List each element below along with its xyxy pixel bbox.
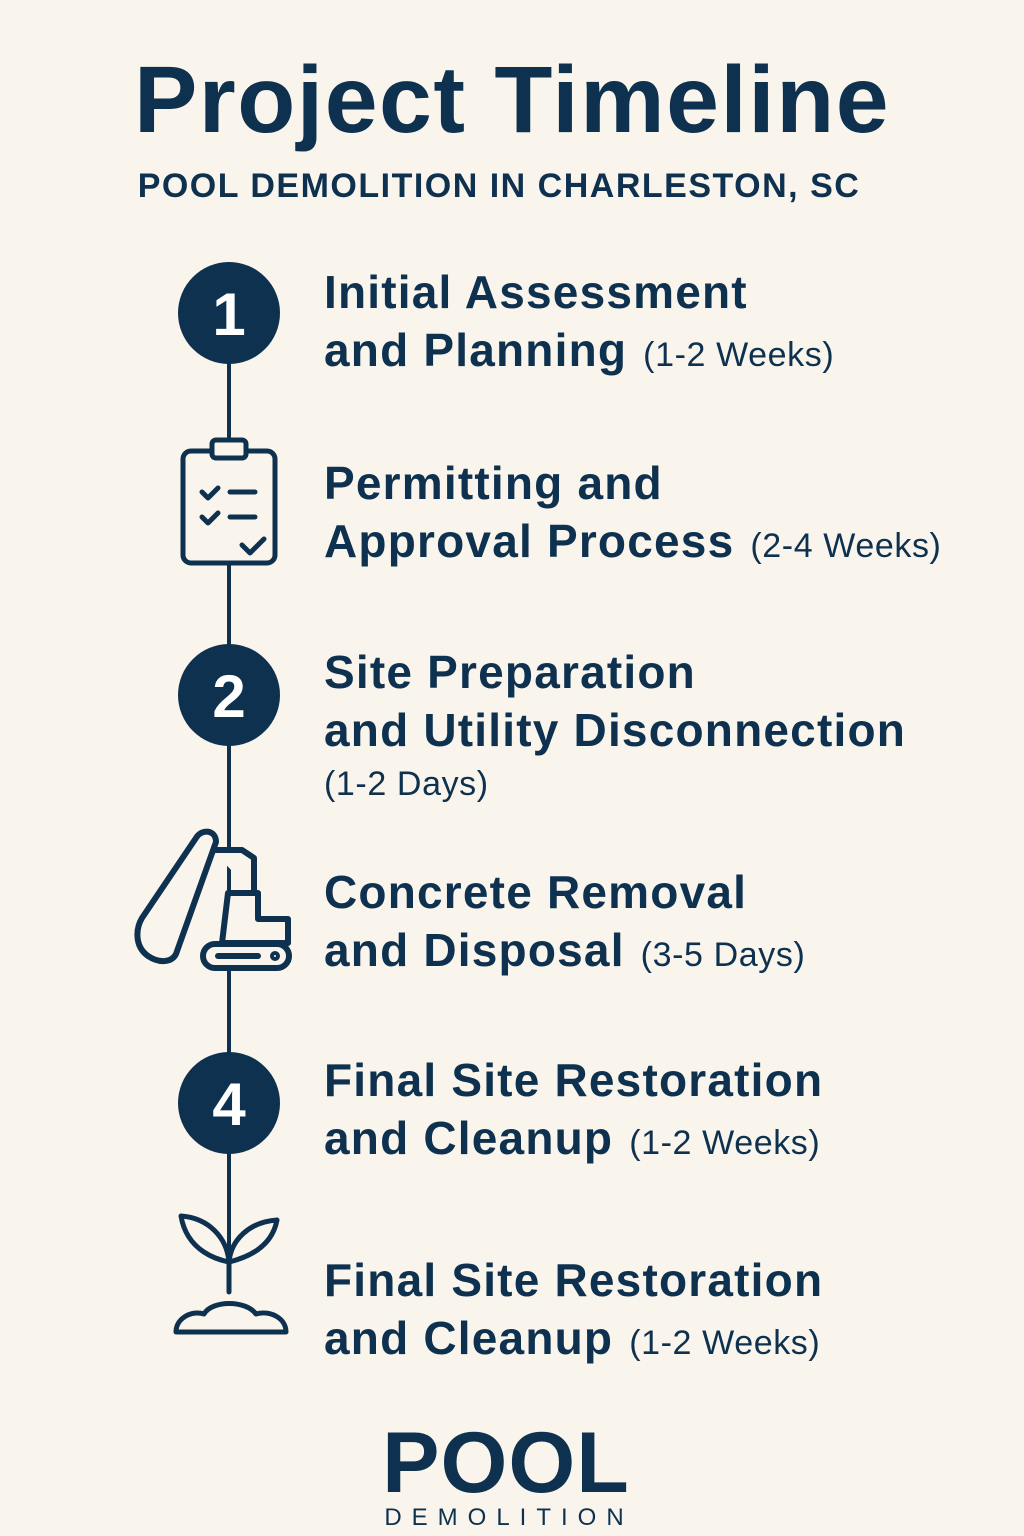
timeline line bbox=[227, 315, 231, 1275]
step 5 text bbox=[324, 1054, 823, 1164]
step marker 4 bbox=[178, 1052, 280, 1154]
logo: DEMOLITION bbox=[384, 1504, 634, 1531]
step 6 text: and Cleanup (1-2 Weeks) bbox=[324, 1312, 820, 1364]
step marker 1 bbox=[178, 262, 280, 364]
step marker 4: 4 bbox=[212, 1071, 246, 1138]
step 1 text: Initial Assessment bbox=[324, 266, 748, 318]
step 5 text: and Cleanup (1-2 Weeks) bbox=[324, 1112, 820, 1164]
step marker 2: 2 bbox=[212, 663, 246, 730]
step 1 text: and Planning (1-2 Weeks) bbox=[324, 324, 834, 376]
step 4 text bbox=[324, 866, 805, 976]
step 4 text: and Disposal (3-5 Days) bbox=[324, 924, 805, 976]
logo: POOL bbox=[382, 1415, 630, 1511]
step 5 text: Final Site Restoration bbox=[324, 1054, 823, 1106]
step marker 1: 1 bbox=[212, 281, 246, 348]
subtitle: POOL DEMOLITION IN CHARLESTON, SC bbox=[138, 167, 860, 205]
step 3 text: (1-2 Days) bbox=[324, 765, 489, 803]
step 1 text bbox=[324, 266, 834, 376]
step 2 text bbox=[324, 457, 941, 567]
step 2 text: Approval Process (2-4 Weeks) bbox=[324, 515, 941, 567]
step marker 2 bbox=[178, 644, 280, 746]
icon: excavator bbox=[137, 832, 289, 968]
title: Project Timeline bbox=[134, 47, 890, 153]
step 3 text: and Utility Disconnection bbox=[324, 704, 906, 756]
step 3 text: Site Preparation bbox=[324, 646, 696, 698]
step 6 text bbox=[324, 1254, 823, 1364]
step 4 text: Concrete Removal bbox=[324, 866, 747, 918]
icon: sprout bbox=[176, 1216, 286, 1332]
step 2 text: Permitting and bbox=[324, 457, 663, 509]
step 3 text bbox=[324, 646, 906, 803]
icon: clipboard bbox=[183, 440, 275, 563]
step 6 text: Final Site Restoration bbox=[324, 1254, 823, 1306]
